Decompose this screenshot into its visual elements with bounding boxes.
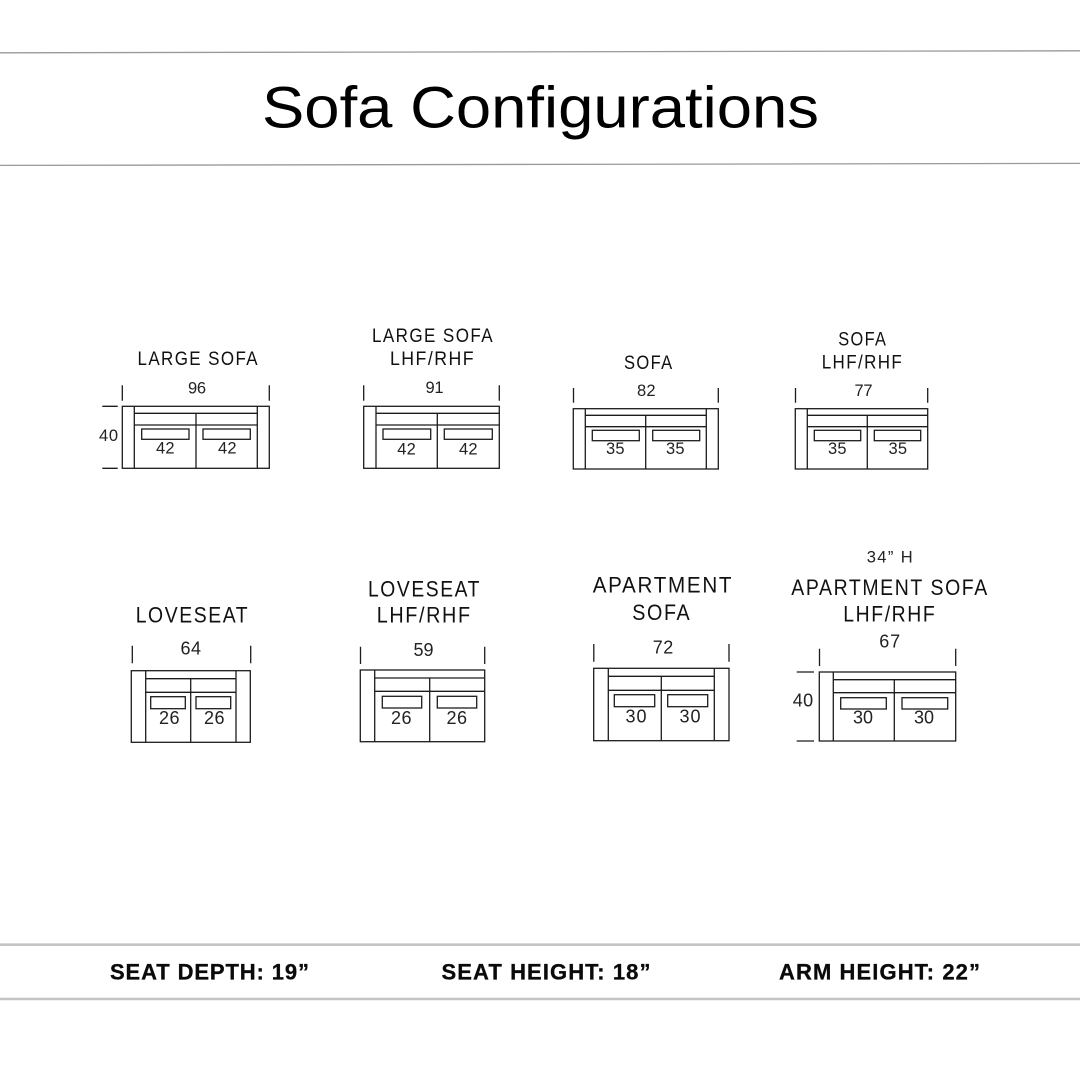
sofa diagram: 30 [680, 707, 700, 727]
width dimension 67: 67 [879, 631, 900, 651]
width dimension 72 [594, 637, 729, 662]
heading: loveseat LHF/RHF [368, 577, 481, 628]
sofa diagram [594, 668, 729, 741]
width dimension 77 [796, 382, 928, 403]
width dimension 82 [574, 382, 718, 403]
sofa diagram [819, 672, 956, 741]
sofa diagram [122, 406, 269, 468]
width dimension 59 [360, 640, 485, 664]
width dimension 77: 77 [854, 382, 872, 400]
heading: large sofa: LARGE SOFA [138, 348, 259, 370]
sofa diagram: 42 [218, 439, 236, 457]
heading: loveseat: LOVESEAT [136, 603, 249, 628]
heading: apartment sofa [593, 573, 733, 625]
heading: sofa: SOFA [624, 352, 674, 374]
width dimension 64: 64 [180, 638, 201, 658]
sofa diagram: 42 [459, 440, 478, 458]
sofa diagram: 26 [159, 708, 180, 728]
heading: sofa LHF/RHF: SOFA [838, 329, 887, 351]
sofa diagram [364, 406, 499, 468]
panel: large sofa [99, 348, 269, 468]
width dimension 67 [820, 631, 956, 666]
heading: apartment sofa LHF/RHF: LHF/RHF [843, 602, 936, 627]
sofa diagram [131, 671, 250, 742]
sofa diagram: 30 [853, 707, 873, 727]
heading: sofa LHF/RHF: LHF/RHF [822, 351, 903, 373]
panel: sofa [573, 352, 718, 469]
width dimension 96 [122, 379, 269, 401]
sofa diagram: 35 [888, 440, 907, 458]
panel: apartment sofa LHF/RHF [791, 548, 989, 741]
width dimension 91: 91 [426, 379, 444, 397]
panel: large sofa LHF/RHF [364, 325, 499, 468]
heading: loveseat LHF/RHF: LOVESEAT [368, 577, 481, 602]
sofa diagram: 42 [156, 439, 174, 457]
seat height: SEAT HEIGHT: 18” [442, 960, 650, 985]
panel: apartment sofa [593, 573, 733, 741]
sofa diagram: 26 [446, 708, 467, 728]
heading: large sofa LHF/RHF: LHF/RHF [390, 348, 475, 370]
sofa diagram: 26 [204, 708, 224, 728]
sofa diagram: 35 [606, 440, 624, 458]
panel: loveseat LHF/RHF [360, 577, 485, 742]
sofa diagram: 26 [391, 708, 412, 728]
width dimension 91 [364, 379, 499, 401]
panel: sofa LHF/RHF [795, 329, 928, 469]
sofa diagram [573, 409, 718, 469]
heading: sofa LHF/RHF [822, 329, 903, 373]
height dimension 40 [793, 672, 814, 741]
height dimension 40 [99, 406, 118, 468]
width dimension 96: 96 [188, 379, 206, 397]
heading: large sofa LHF/RHF: LARGE SOFA [372, 325, 494, 347]
heading: apartment sofa: SOFA [632, 600, 691, 625]
sofa diagram: 30 [626, 707, 646, 727]
sofa diagram: 35 [666, 440, 684, 458]
sofa diagram: 30 [914, 707, 934, 727]
arm height: ARM HEIGHT: 22” [779, 960, 980, 985]
sofa diagram: 42 [397, 440, 416, 458]
sofa diagram: 35 [828, 440, 846, 458]
seat depth: SEAT DEPTH: 19” [110, 960, 309, 985]
heading: apartment sofa LHF/RHF [791, 575, 989, 627]
width dimension 59: 59 [414, 640, 434, 660]
heading: loveseat LHF/RHF: LHF/RHF [377, 603, 472, 628]
sofa diagram [360, 670, 485, 742]
height dimension 40: 40 [99, 427, 118, 445]
heading: apartment sofa: APARTMENT [593, 573, 733, 598]
width dimension 82: 82 [637, 382, 656, 400]
panel: loveseat [131, 603, 251, 742]
sofa diagram [795, 409, 928, 469]
note: 34 inch height: 34” H [867, 548, 913, 566]
width dimension 72: 72 [653, 637, 673, 657]
footer band: seat and arm measurements [0, 945, 1080, 999]
heading: large sofa LHF/RHF [372, 325, 494, 370]
height dimension 40: 40 [793, 691, 813, 711]
heading: apartment sofa LHF/RHF: APARTMENT SOFA [791, 575, 989, 600]
title: Sofa Configurations [262, 75, 819, 140]
